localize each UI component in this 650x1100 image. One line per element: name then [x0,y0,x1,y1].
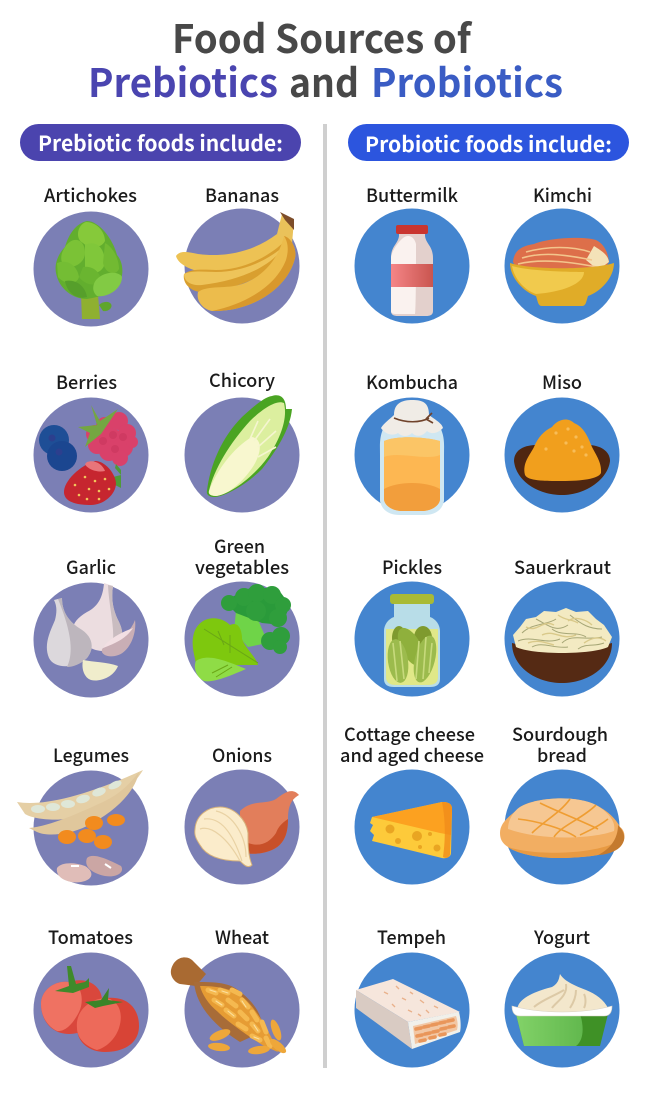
icon: cheese wedge [370,802,452,858]
item: legumes: Legumes [53,742,129,768]
item: green vegetables: vegetables [195,554,289,580]
icon: berries [39,405,138,505]
item: sauerkraut [504,554,620,696]
item: pickles [354,554,470,696]
item: kombucha: Kombucha [366,369,458,395]
item: onions [184,742,300,884]
heading: prebiotic foods: Prebiotic foods include: [38,128,283,158]
item: garlic: Garlic [66,554,116,580]
icon: legumes [17,770,143,882]
icon: onions [195,791,299,867]
icon: greens [193,584,291,681]
icon: milk bottle [391,225,433,316]
item: onions: Onions [212,742,272,768]
icon: tempeh block [356,979,461,1049]
icon: chicory [207,395,292,497]
item: miso: Miso [542,369,582,395]
item: chicory [184,367,300,512]
item: wheat: Wheat [215,924,270,950]
item: green vegetables: Green [214,533,265,559]
title: Food Sources of [172,9,472,65]
title [88,9,563,109]
item: garlic [34,554,148,698]
icon: tomatoes [41,966,139,1052]
item: green vegetables [184,533,300,696]
icon: sauerkraut bowl [512,608,612,683]
title: Probiotics [371,53,563,109]
item: kimchi: Kimchi [533,182,592,208]
item: artichokes: Artichokes [44,182,137,208]
icon: bananas [176,212,295,311]
item: berries [34,369,148,512]
icon: kombucha jar [380,400,444,515]
item: bananas [176,182,300,324]
item: pickles: Pickles [382,554,442,580]
icon: bread loaf [500,798,624,858]
icon: yogurt cup [512,974,612,1046]
icon: wheat scoop [171,957,288,1055]
item: artichokes [34,182,148,326]
icon: miso bowl [514,420,610,495]
item: tempeh: Tempeh [377,924,446,950]
item: kombucha [354,369,470,515]
item: legumes [17,742,148,886]
panel: probiotic foods [340,182,624,1068]
item: tomatoes [34,924,148,1068]
item: sourdough bread [500,721,624,884]
item: miso [504,369,620,512]
panel: prebiotic foods [17,182,300,1068]
item: cottage cheese and aged cheese [340,721,484,884]
item: yogurt: Yogurt [533,924,591,950]
icon: pickle jar [384,594,441,687]
item: buttermilk: Buttermilk [366,182,458,208]
title: Prebiotics [88,53,278,109]
item: sauerkraut: Sauerkraut [514,554,612,580]
item: chicory: Chicory [209,367,275,393]
item: kimchi [504,182,620,324]
item: cottage cheese and aged cheese: Cottage cheese [344,721,475,747]
item: sourdough bread: Sourdough [512,721,608,747]
icon: garlic [47,583,135,680]
item: berries: Berries [56,369,117,395]
item: tempeh [354,924,470,1068]
icon: artichoke [56,221,122,319]
item: wheat [171,924,300,1068]
item: bananas: Bananas [205,182,279,208]
item: tomatoes: Tomatoes [48,924,133,950]
icon: kimchi bowl [510,238,614,306]
item: yogurt [504,924,620,1068]
item: cottage cheese and aged cheese: and aged cheese [340,742,484,768]
title: and [289,53,359,109]
item: buttermilk [354,182,470,324]
item: sourdough bread: bread [537,742,587,768]
heading: probiotic foods: Probiotic foods include: [365,129,612,159]
